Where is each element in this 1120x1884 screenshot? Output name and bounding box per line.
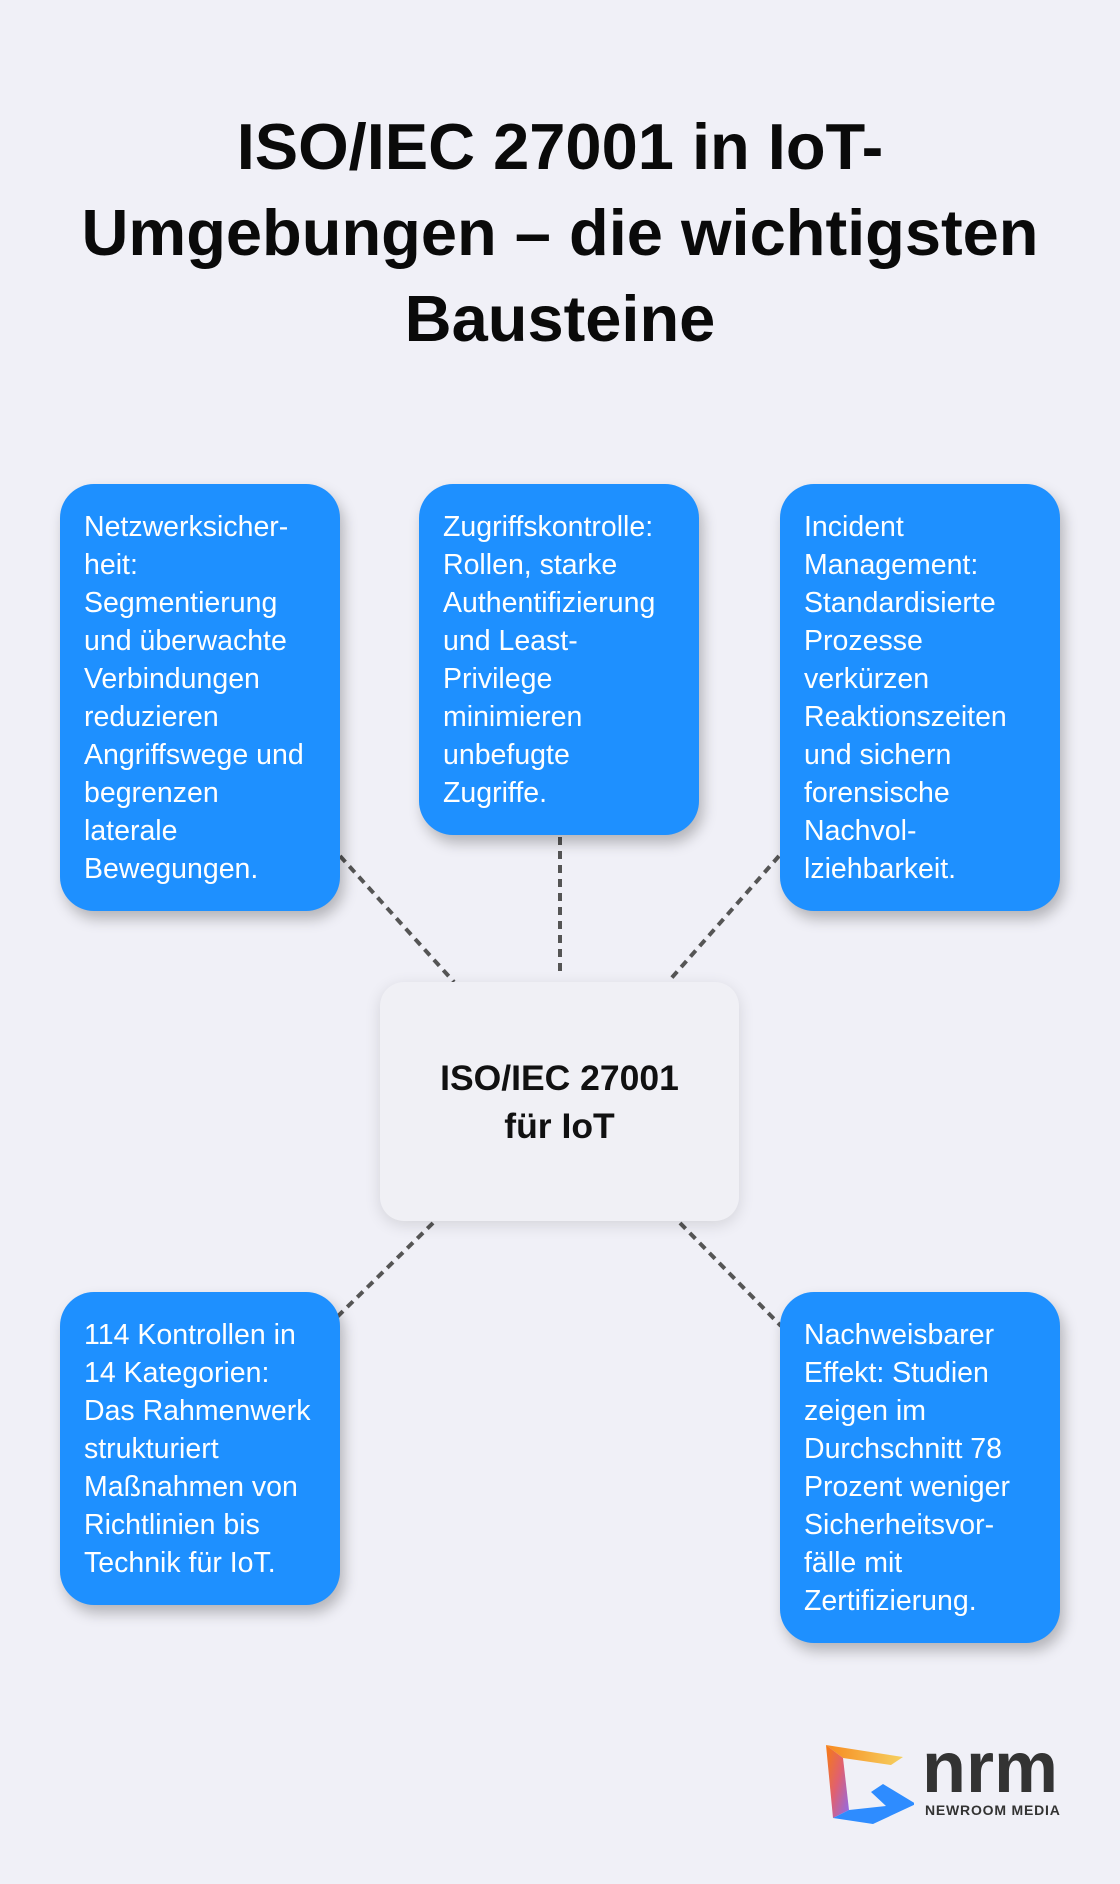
panel: 114 Kontrollen [60,1292,340,1605]
panel: Incident Management: verkürzen [804,663,929,695]
panel: Nachweisbarer Effekt: Zertifizierung. [804,1585,977,1617]
panel: Incident Management: Incident [804,511,904,543]
panel: Zugriffskontrolle: unbefugte [443,739,570,771]
panel: 114 Kontrollen: Richtlinien bis [84,1509,260,1541]
logo: nrm newroom media [826,1728,1061,1824]
panel: Incident Management: forensische [804,777,950,809]
panel: Netzwerksicherheit: Bewegungen. [84,853,258,885]
title [81,110,1039,355]
panel: Zugriffskontrolle: und Least- [443,625,578,657]
panel: Netzwerksicherheit: heit: [84,549,138,581]
panel: Incident Management: lziehbarkeit. [804,853,956,885]
panel: Netzwerksicherheit: Netzwerksicher- [84,511,288,543]
panel: 114 Kontrollen: Das Rahmenwerk [84,1395,310,1427]
panel: Nachweisbarer Effekt: Nachweisbarer [804,1319,994,1351]
title: Umgebungen – die wichtigsten [81,196,1039,269]
panel: Zugriffskontrolle: Privilege [443,663,552,695]
panel: Zugriffskontrolle: Zugriffskontrolle: [443,511,653,543]
panel: Nachweisbarer Effekt: zeigen im [804,1395,926,1427]
panel: 114 Kontrollen: Maßnahmen von [84,1471,298,1503]
panel: Nachweisbarer Effekt: Effekt: Studien [804,1357,989,1389]
center hub [380,982,739,1221]
logo: nrm newroom media: NEWROOM MEDIA [925,1802,1061,1818]
panel: Zugriffskontrolle: minimieren [443,701,582,733]
panel: Nachweisbarer Effekt [780,1292,1060,1643]
logo text: nrm [922,1728,1058,1808]
panel: Netzwerksicherheit [60,484,340,911]
panel: Netzwerksicherheit: reduzieren [84,701,219,733]
panel: Incident Management: Prozesse [804,625,923,657]
panel: Netzwerksicherheit: Verbindungen [84,663,260,695]
panel: Incident Management [780,484,1060,911]
panel: Netzwerksicherheit: und überwachte [84,625,287,657]
panel: Incident Management: Reaktionszeiten [804,701,1007,733]
panel: Zugriffskontrolle: Zugriffe. [443,777,547,809]
panel: Netzwerksicherheit: Angriffswege und [84,739,304,771]
title: Bausteine [405,282,715,355]
panel: Netzwerksicherheit: Segmentierung [84,587,277,619]
panel: 114 Kontrollen: strukturiert [84,1433,219,1465]
panel: Incident Management: Management: [804,549,978,581]
panel: Incident Management: und sichern [804,739,951,771]
panel: 114 Kontrollen: 114 Kontrollen in [84,1319,296,1351]
title: ISO/IEC 27001 in IoT- [237,110,883,183]
panel: Netzwerksicherheit: laterale [84,815,177,847]
panel: Zugriffskontrolle: Rollen, starke [443,549,617,581]
icon: logo mark [826,1745,914,1824]
center hub: ISO/IEC 27001 [440,1058,679,1098]
panel: Zugriffskontrolle: Authentifizierung [443,587,655,619]
panel: 114 Kontrollen: Technik für IoT. [84,1547,276,1579]
panel: Netzwerksicherheit: begrenzen [84,777,219,809]
panel: 114 Kontrollen: 14 Kategorien: [84,1357,269,1389]
panel: Incident Management: Nachvol- [804,815,916,847]
panel: Incident Management: Standardisierte [804,587,996,619]
panel: Nachweisbarer Effekt: Durchschnitt 78 [804,1433,1002,1465]
panel: Nachweisbarer Effekt: Prozent weniger [804,1471,1010,1503]
center hub: für IoT [504,1106,615,1146]
panel: Nachweisbarer Effekt: Sicherheitsvor- [804,1509,994,1541]
panel: Nachweisbarer Effekt: fälle mit [804,1547,902,1579]
panel: Zugriffskontrolle [419,484,699,835]
